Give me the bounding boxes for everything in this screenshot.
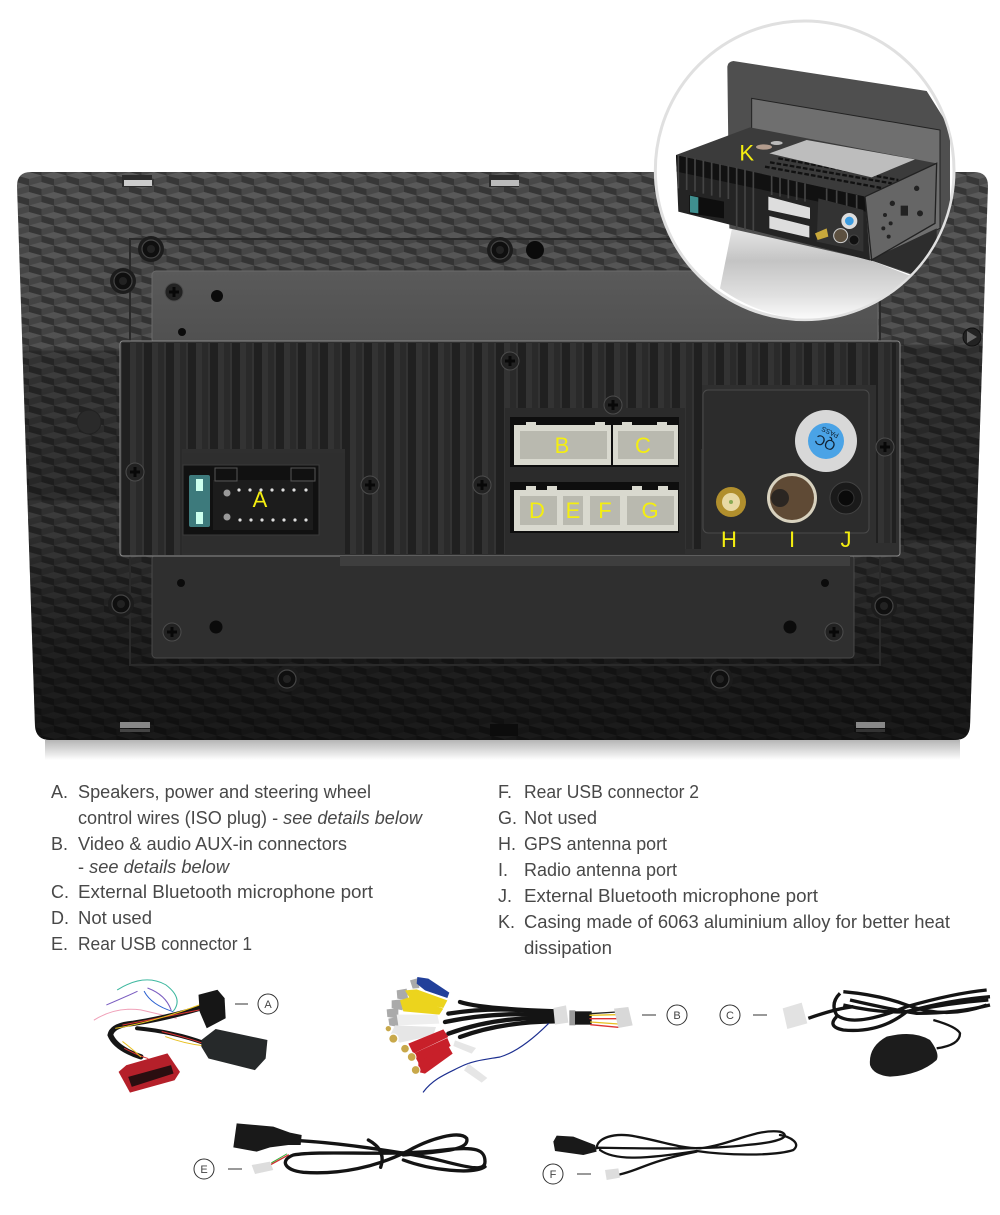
- item A: Speakers, power and steering wheel: [78, 782, 371, 802]
- callout E: [194, 1159, 242, 1179]
- item I: Radio antenna port: [524, 860, 677, 880]
- yellow port labels: H: [721, 527, 737, 552]
- QC pass sticker: [795, 410, 857, 472]
- callout B: [642, 1005, 687, 1025]
- yellow port labels: B: [555, 433, 569, 458]
- gold red tips: [401, 1044, 409, 1053]
- yellow port labels: [253, 433, 852, 552]
- callout A: [235, 994, 278, 1014]
- wires: [270, 1155, 288, 1165]
- carbon fibre back panel: [10, 170, 995, 745]
- inset side bracket: [865, 163, 937, 260]
- coloured wires: [590, 1015, 618, 1024]
- item H: H.: [498, 834, 516, 854]
- yellow port labels: G: [641, 498, 659, 523]
- accessory E: USB cable 1: [233, 1123, 485, 1174]
- callout B: B: [673, 1010, 681, 1022]
- legend right column: [498, 782, 950, 958]
- item D: Not used: [78, 908, 152, 928]
- item K: Casing made of 6063 aluminium alloy for better heat: [524, 912, 950, 932]
- aluminium casing with fins: [120, 341, 900, 566]
- inset casing top: [676, 127, 937, 197]
- item A: [51, 782, 423, 828]
- yellow port labels: D: [529, 498, 545, 523]
- ring and sleeve: [569, 1010, 575, 1025]
- legend left column: [51, 782, 423, 954]
- item B: B.: [51, 834, 68, 854]
- thick wire loom: [110, 1008, 200, 1057]
- item A: A.: [51, 782, 68, 802]
- item B: Video & audio AUX-in connectors: [78, 834, 347, 854]
- item D: D.: [51, 908, 69, 928]
- accessory A: ISO harness with steering module: [94, 980, 267, 1093]
- item B: - see details below: [78, 857, 230, 877]
- white plug: [252, 1162, 273, 1174]
- casing screws: [126, 352, 894, 494]
- connector A: ISO socket: [183, 465, 319, 535]
- item K: K.: [498, 912, 515, 932]
- item C: C.: [51, 882, 69, 902]
- USB plug: [553, 1136, 597, 1155]
- item E: E.: [51, 934, 68, 954]
- blue RCA: [417, 977, 449, 998]
- product rear view: head unit back panel: [10, 170, 995, 760]
- port J: microphone: [830, 482, 862, 514]
- inset spec sticker: [769, 140, 915, 177]
- yellow port labels: J: [840, 527, 852, 552]
- inset ports: [841, 213, 857, 229]
- inset ISO socket: [689, 195, 724, 218]
- antenna recess panel: [703, 390, 869, 533]
- microphone body: [870, 1034, 937, 1077]
- port H: GPS antenna: [716, 487, 746, 517]
- connectors D, E, F and G: [510, 482, 679, 533]
- callout C: [720, 1005, 767, 1025]
- coiled cable: [808, 990, 990, 1048]
- blue wire: [423, 1024, 548, 1092]
- item H: GPS antenna port: [524, 834, 667, 854]
- yellow port labels: F: [598, 498, 612, 523]
- inset carbon floor: [870, 228, 937, 274]
- QC pass sticker: QC: [812, 431, 838, 455]
- yellow port labels: C: [635, 433, 651, 458]
- item F: F.: [498, 782, 512, 802]
- heat shrink band: [553, 1005, 568, 1025]
- yellow RCA: [405, 989, 447, 1008]
- gold RCA tips: [386, 1026, 391, 1031]
- accessory C: Bluetooth microphone: [783, 990, 990, 1077]
- black cables: [445, 1002, 555, 1037]
- yellow port labels: E: [566, 498, 580, 523]
- callout F: [543, 1164, 591, 1184]
- callout A: A: [264, 999, 272, 1011]
- item C: External Bluetooth microphone port: [78, 882, 373, 902]
- inset label K: K: [739, 141, 754, 166]
- inset: angled view of unit in circle: [655, 21, 954, 320]
- item G: G.: [498, 808, 517, 828]
- white plug: [605, 1168, 620, 1180]
- item E: Rear USB connector 1: [78, 934, 252, 954]
- wire tags: [464, 1064, 487, 1083]
- yellow port labels: I: [789, 527, 795, 552]
- mounting posts: [108, 236, 897, 692]
- item B: [51, 834, 347, 877]
- item J: J.: [498, 886, 512, 906]
- plate screws: [163, 282, 844, 641]
- item A: control wires (ISO plug) - see details below: [78, 808, 423, 828]
- inset casing front: [676, 155, 870, 260]
- accessory B: RCA AUX harness: [386, 977, 633, 1092]
- cable loops: [285, 1135, 485, 1173]
- inset seals: [756, 144, 772, 150]
- panel floor shadow: [45, 740, 960, 760]
- callout C: C: [726, 1010, 734, 1022]
- callout F: F: [550, 1169, 557, 1181]
- red car plug: [119, 1053, 180, 1093]
- inset reflection: [720, 229, 909, 318]
- silver RCA tips: [387, 978, 419, 1027]
- inset metal plate: [752, 98, 940, 260]
- inset heat sink slots: [765, 158, 898, 188]
- thin loose wires: [94, 980, 177, 1020]
- item J: External Bluetooth microphone port: [524, 886, 818, 906]
- inset white connectors: [768, 197, 810, 219]
- item K: [498, 912, 950, 958]
- inset antenna panel: [817, 198, 863, 252]
- item K: dissipation: [524, 938, 612, 958]
- accessory F: USB cable 2: [553, 1131, 796, 1180]
- connectors B and C: [510, 417, 679, 467]
- callout E: E: [200, 1164, 208, 1176]
- item G: Not used: [524, 808, 597, 828]
- plate holes: [177, 241, 829, 634]
- cable loops: [597, 1131, 796, 1174]
- item I: I.: [498, 860, 508, 880]
- yellow port labels: A: [253, 487, 268, 512]
- item F: Rear USB connector 2: [524, 782, 699, 802]
- black ISO plug: [199, 990, 226, 1028]
- inset back panel: [727, 61, 950, 288]
- white RCA: [397, 1015, 439, 1025]
- white plug: [614, 1007, 633, 1028]
- metal mounting plate: [152, 271, 878, 343]
- USB plug: [233, 1123, 302, 1152]
- QC pass sticker: PASS: [820, 424, 840, 438]
- red RCA: [408, 1029, 448, 1054]
- white plug: [783, 1003, 807, 1029]
- inset gold port: [815, 228, 828, 240]
- steering control module: [201, 1029, 267, 1070]
- port I: radio antenna: [767, 473, 817, 523]
